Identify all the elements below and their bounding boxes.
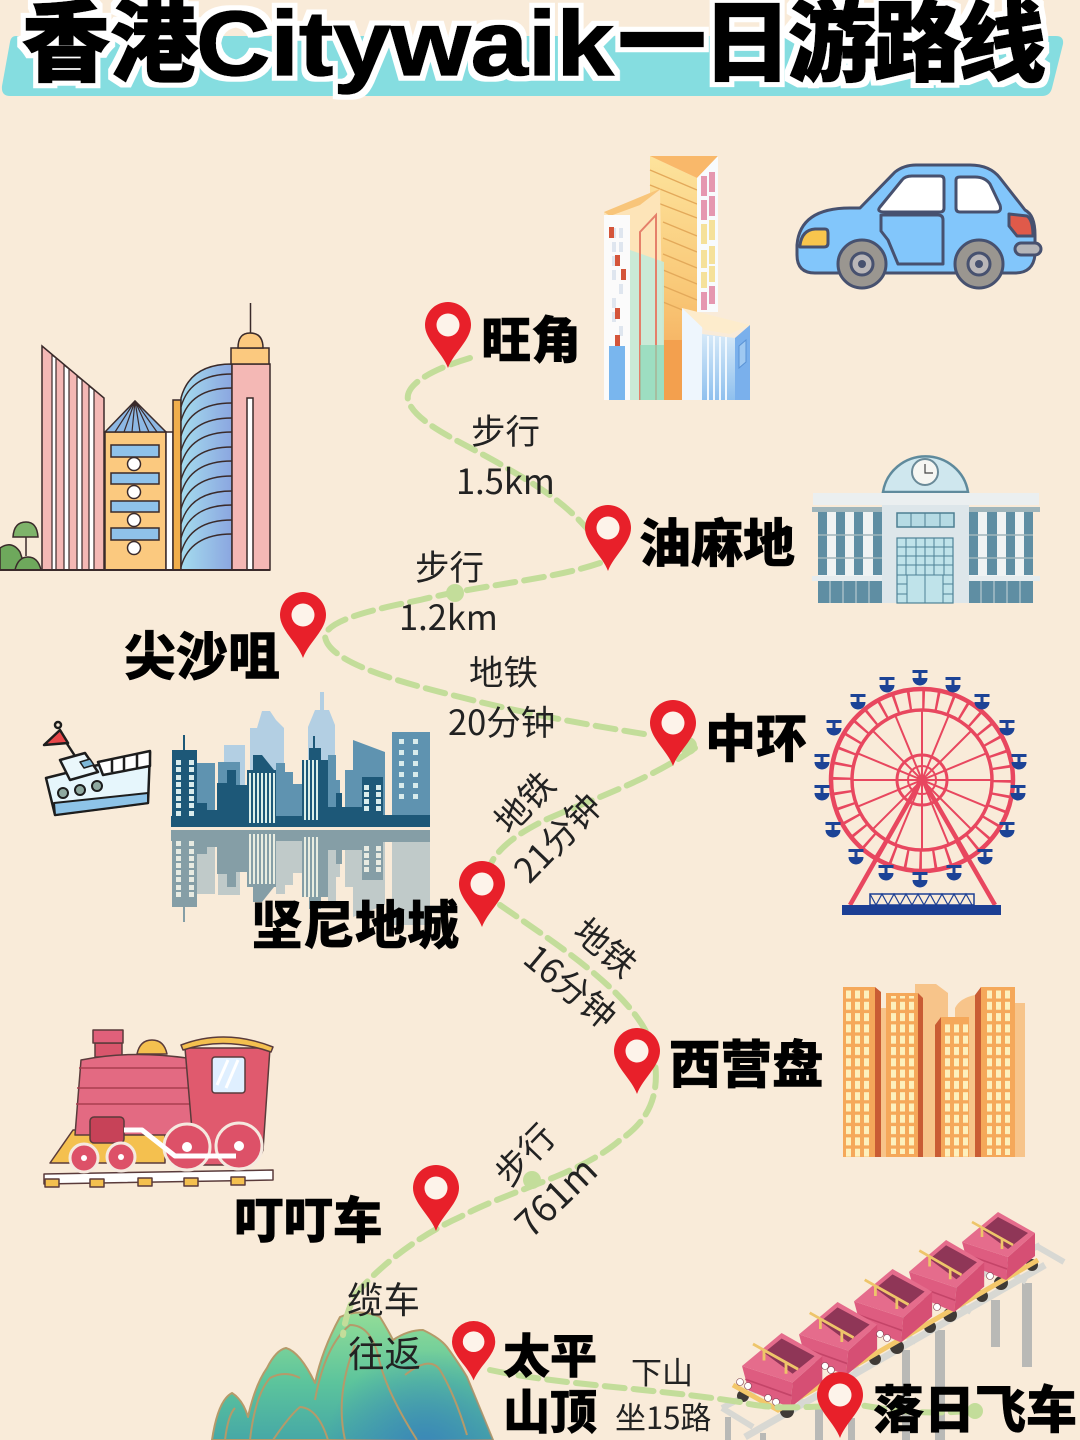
apartment block 4 — [975, 987, 1015, 1157]
route note: walk 1.5km: 步行 — [471, 404, 540, 454]
cab — [185, 1048, 270, 1165]
car body — [797, 165, 1035, 273]
illustration: skyline with reflection — [171, 692, 430, 925]
route note: downhill bus: 下山 — [631, 1348, 693, 1393]
pin: Kennedy Town — [459, 861, 505, 927]
station facade — [882, 505, 969, 603]
pin: Yau Ma Tei — [585, 505, 631, 571]
pin: The Peak — [452, 1321, 495, 1380]
white and orange strips — [166, 400, 181, 570]
label: 旺角: 旺角 — [481, 301, 581, 373]
ship hull — [46, 752, 150, 815]
title — [22, 0, 1045, 100]
illustration: blue car — [797, 165, 1041, 288]
label: 太平: 太平 — [503, 1318, 597, 1387]
route note: metro 21 min: 地铁 — [481, 759, 565, 843]
car door — [881, 215, 943, 264]
title banner — [2, 36, 1063, 96]
car windows — [879, 176, 1000, 212]
apartment block 2 — [886, 993, 923, 1157]
connecting rods — [124, 1130, 236, 1156]
pale back blocks — [881, 984, 1025, 1157]
ship cabin — [60, 753, 98, 780]
illustration: glass towers at Mong Kok — [604, 156, 750, 400]
illustration: green mountain — [212, 1312, 493, 1440]
route note: metro 16 min — [515, 904, 649, 1038]
route dots — [446, 584, 983, 1419]
pin: Sai Ying Pun — [614, 1028, 660, 1094]
route note: metro 16 min: 地铁 — [564, 904, 649, 987]
cylinder box — [90, 1117, 124, 1143]
coaster cars — [742, 1212, 1035, 1408]
clock dome — [883, 456, 968, 492]
tall yellow tower — [650, 156, 718, 400]
label: 油麻地: 油麻地 — [639, 502, 795, 577]
route note: walk 1.2km — [399, 540, 498, 640]
route note: metro 20 min: 20分钟 — [448, 695, 555, 745]
wheel base — [842, 894, 1001, 915]
route note: walk 761m — [481, 1111, 607, 1248]
label: 尖沙咀: 尖沙咀 — [124, 615, 280, 690]
apartment block 1 — [843, 987, 881, 1157]
cab roof — [181, 1037, 273, 1052]
illustration: steam train — [44, 1030, 273, 1187]
skyline reflection — [171, 830, 430, 925]
coaster track — [722, 1245, 1064, 1437]
wheels — [70, 1123, 262, 1172]
car wheels — [838, 240, 1003, 288]
pin: Sunset Coaster — [817, 1372, 863, 1438]
wheel legs — [850, 782, 995, 905]
boiler — [75, 1054, 193, 1135]
route note: walk 761m: 步行 — [481, 1111, 565, 1195]
route note: cable car: 缆车 — [347, 1271, 420, 1324]
low blue tower — [682, 308, 750, 400]
curved blue tower — [181, 364, 232, 570]
wings — [812, 507, 1040, 603]
route note: metro 20 min: 地铁 — [469, 645, 538, 695]
illustration: sunset roller coaster — [722, 1212, 1064, 1440]
label: 叮叮车: 叮叮车 — [234, 1182, 382, 1253]
illustration: ship — [44, 722, 150, 815]
yellow tower with pyramid roof — [105, 401, 166, 570]
label: 中环: 中环 — [705, 698, 807, 772]
light back towers — [224, 692, 335, 827]
cowcatcher — [50, 1130, 165, 1163]
station roof slab — [813, 493, 1039, 505]
pin: Central — [650, 700, 696, 766]
wheel rim and spokes — [831, 689, 1013, 871]
route note: downhill bus: 坐15路 — [615, 1393, 711, 1438]
label: 坚尼地城: 坚尼地城 — [251, 884, 459, 959]
pin: Mong Kok — [425, 302, 471, 368]
route line — [325, 358, 978, 1412]
illustration: orange apartment blocks — [843, 984, 1025, 1157]
label: 西营盘: 西营盘 — [669, 1023, 824, 1098]
route note: walk 1.5km — [456, 404, 555, 504]
slanted striped tower — [42, 346, 104, 570]
route note: walk 1.2km: 1.2km — [399, 590, 498, 640]
route note: walk 1.5km: 1.5km — [456, 454, 555, 504]
route note: cable car — [347, 1271, 421, 1378]
chimney — [93, 1030, 167, 1057]
tree cluster — [0, 522, 41, 570]
coaster platform — [733, 1260, 1038, 1410]
pin: Ding Ding — [413, 1165, 459, 1231]
pink tower with dome — [231, 303, 270, 570]
pin: Tsim Sha Tsui — [280, 592, 326, 658]
coaster headlights — [736, 1272, 994, 1406]
apartment block 3 — [935, 1017, 970, 1157]
wheel gondolas — [814, 670, 1026, 888]
left white tower — [604, 188, 664, 400]
route note: metro 21 min: 21分钟 — [501, 780, 611, 892]
coaster pillars — [725, 1283, 1032, 1440]
route note: metro 20 min — [448, 645, 555, 745]
illustration: ferris wheel — [814, 670, 1026, 915]
ship flag — [44, 722, 75, 756]
car lights — [800, 229, 828, 247]
route note: downhill bus — [615, 1348, 711, 1438]
rail — [44, 1170, 273, 1187]
cab window — [212, 1057, 245, 1093]
coaster wheels — [737, 1259, 1038, 1418]
route note: metro 16 min: 16分钟 — [515, 931, 629, 1038]
route note: walk 1.2km: 步行 — [415, 540, 484, 590]
route note: walk 761m: 761m — [501, 1142, 607, 1248]
route note: cable car: 往返 — [348, 1325, 421, 1378]
illustration: clock-tower station — [812, 456, 1040, 603]
illustration: colourful towers left — [0, 303, 270, 570]
